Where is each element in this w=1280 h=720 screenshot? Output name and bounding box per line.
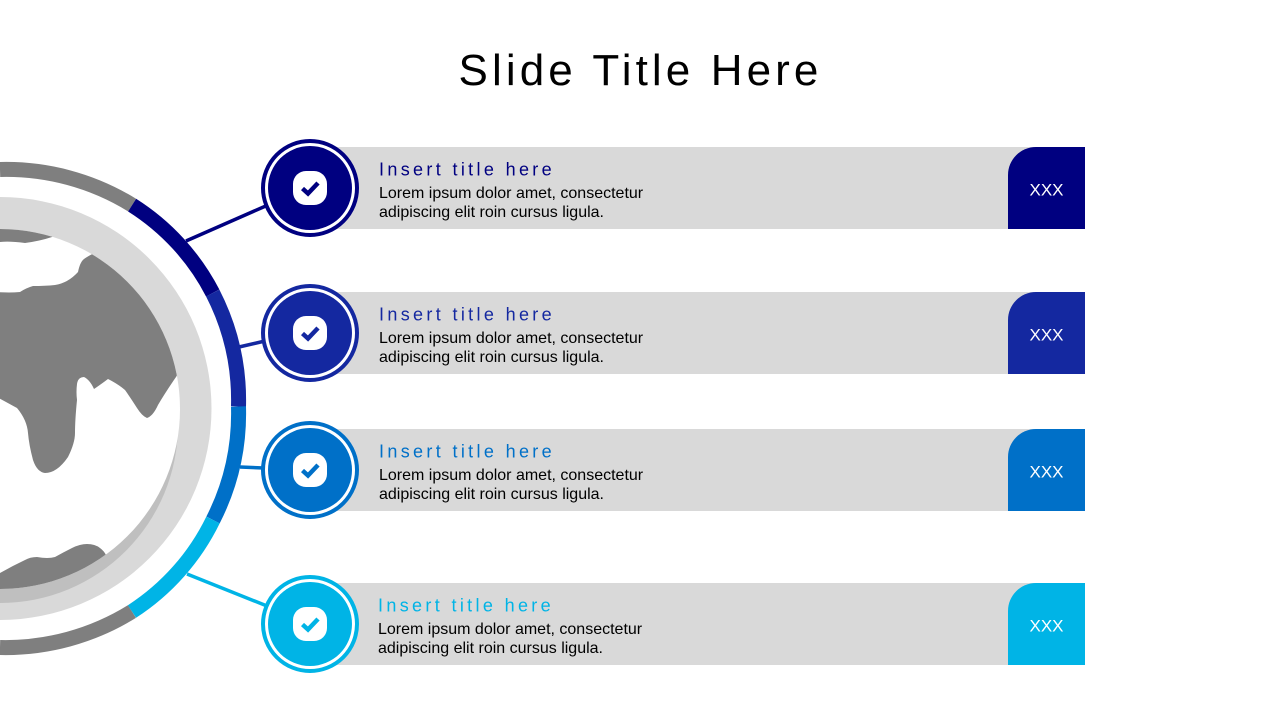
item heading: Insert title here	[379, 304, 555, 324]
value tab	[1008, 147, 1085, 229]
item text: adipiscing elit roin cursus ligula.	[379, 204, 604, 221]
value: XXX	[1029, 326, 1064, 344]
globe light ring	[0, 197, 212, 620]
outer ring: gray bottom arc	[0, 612, 132, 648]
item text: adipiscing elit roin cursus ligula.	[378, 640, 603, 657]
item heading: Insert title here	[379, 442, 555, 462]
outer ring: cyan arc	[132, 520, 213, 612]
value tab	[1008, 292, 1085, 374]
icon: check badge	[263, 423, 357, 517]
connector: blue	[239, 341, 265, 347]
item text: Lorem ipsum dolor amet, consectetur	[379, 467, 644, 484]
item text: Lorem ipsum dolor amet, consectetur	[379, 330, 644, 347]
value tab	[1008, 429, 1085, 511]
outer ring: mid blue arc	[213, 406, 239, 520]
item text: adipiscing elit roin cursus ligula.	[379, 486, 604, 503]
item heading: Insert title here	[379, 160, 555, 180]
outer ring: gray top arc	[0, 169, 132, 205]
bar	[310, 583, 1040, 665]
item text: adipiscing elit roin cursus ligula.	[379, 349, 604, 366]
outer ring: navy arc	[132, 205, 213, 293]
value: XXX	[1029, 462, 1064, 482]
panel: item 3	[263, 423, 1085, 517]
icon: check badge	[263, 286, 357, 380]
value: XXX	[1029, 616, 1064, 636]
icon: check badge	[263, 577, 357, 671]
item text: Lorem ipsum dolor amet, consectetur	[378, 621, 643, 638]
bar	[310, 292, 1040, 374]
globe white disc	[0, 229, 180, 589]
panel: globe	[0, 169, 239, 648]
bar	[310, 429, 1040, 511]
title: Slide Title Here	[459, 46, 822, 95]
world map land	[0, 229, 177, 589]
icon: check badge	[263, 141, 357, 235]
connector: cyan	[187, 574, 267, 606]
item heading: Insert title here	[378, 596, 554, 616]
bar	[310, 147, 1040, 229]
panel: item 2	[263, 286, 1085, 380]
item text: Lorem ipsum dolor amet, consectetur	[379, 185, 644, 202]
panel: item 4	[263, 577, 1085, 671]
value: XXX	[1029, 180, 1064, 200]
value tab	[1008, 583, 1085, 665]
outer ring: blue arc	[213, 293, 239, 406]
connector: mid blue	[240, 467, 264, 468]
connector: navy	[186, 205, 268, 241]
globe inner shadow	[0, 247, 178, 603]
panel: item 1	[263, 141, 1085, 235]
